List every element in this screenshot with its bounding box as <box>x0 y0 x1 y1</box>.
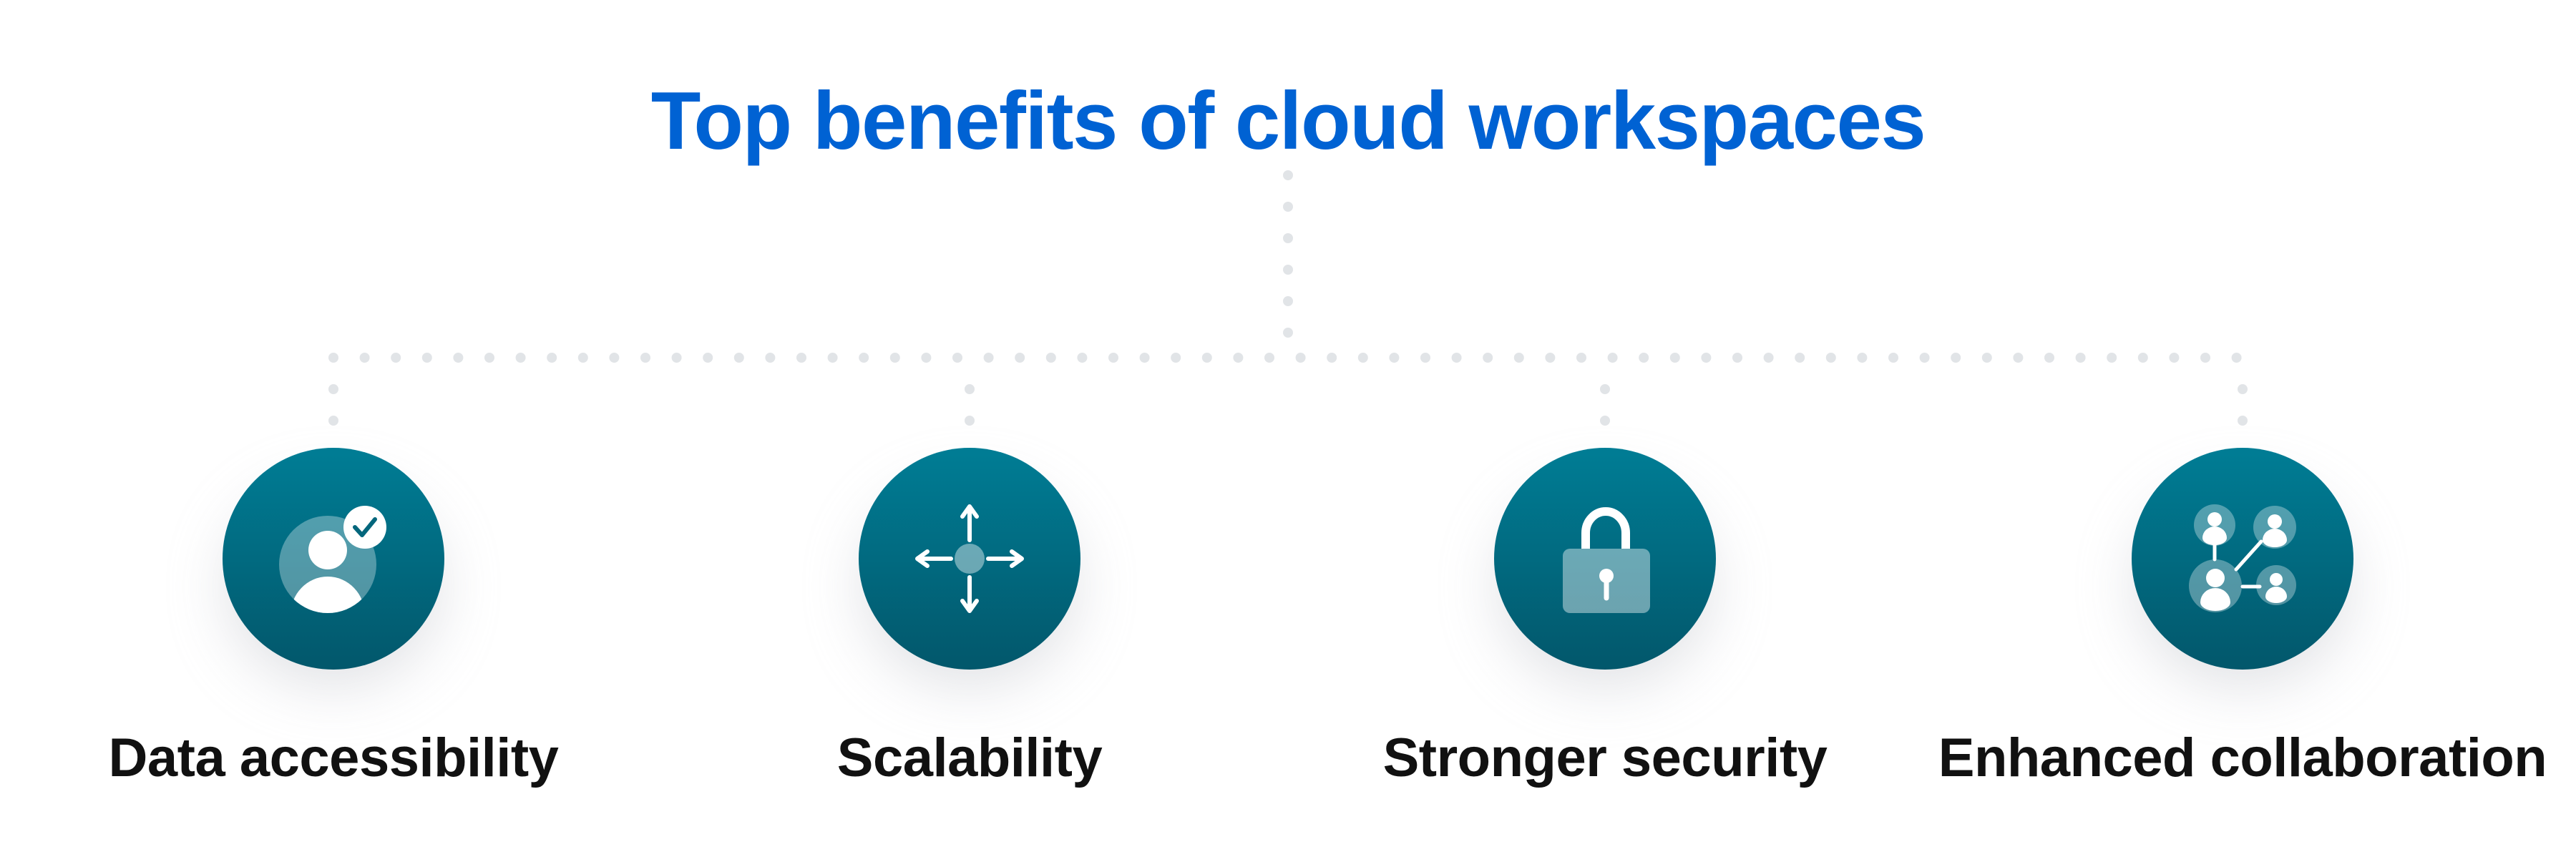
title: Top benefits of cloud workspaces <box>651 76 1925 167</box>
dotted connector lines <box>333 170 2243 452</box>
icon: collaboration <box>2132 448 2353 687</box>
icon: data accessibility <box>223 448 444 687</box>
label: enhanced collaboration: Enhanced collaboration <box>1938 728 2547 788</box>
label: scalability: Scalability <box>837 728 1102 788</box>
label: stronger security: Stronger security <box>1383 728 1827 788</box>
icon: scalability <box>859 448 1080 687</box>
label: data accessibility: Data accessibility <box>109 728 558 788</box>
icon: security lock <box>1494 448 1716 687</box>
